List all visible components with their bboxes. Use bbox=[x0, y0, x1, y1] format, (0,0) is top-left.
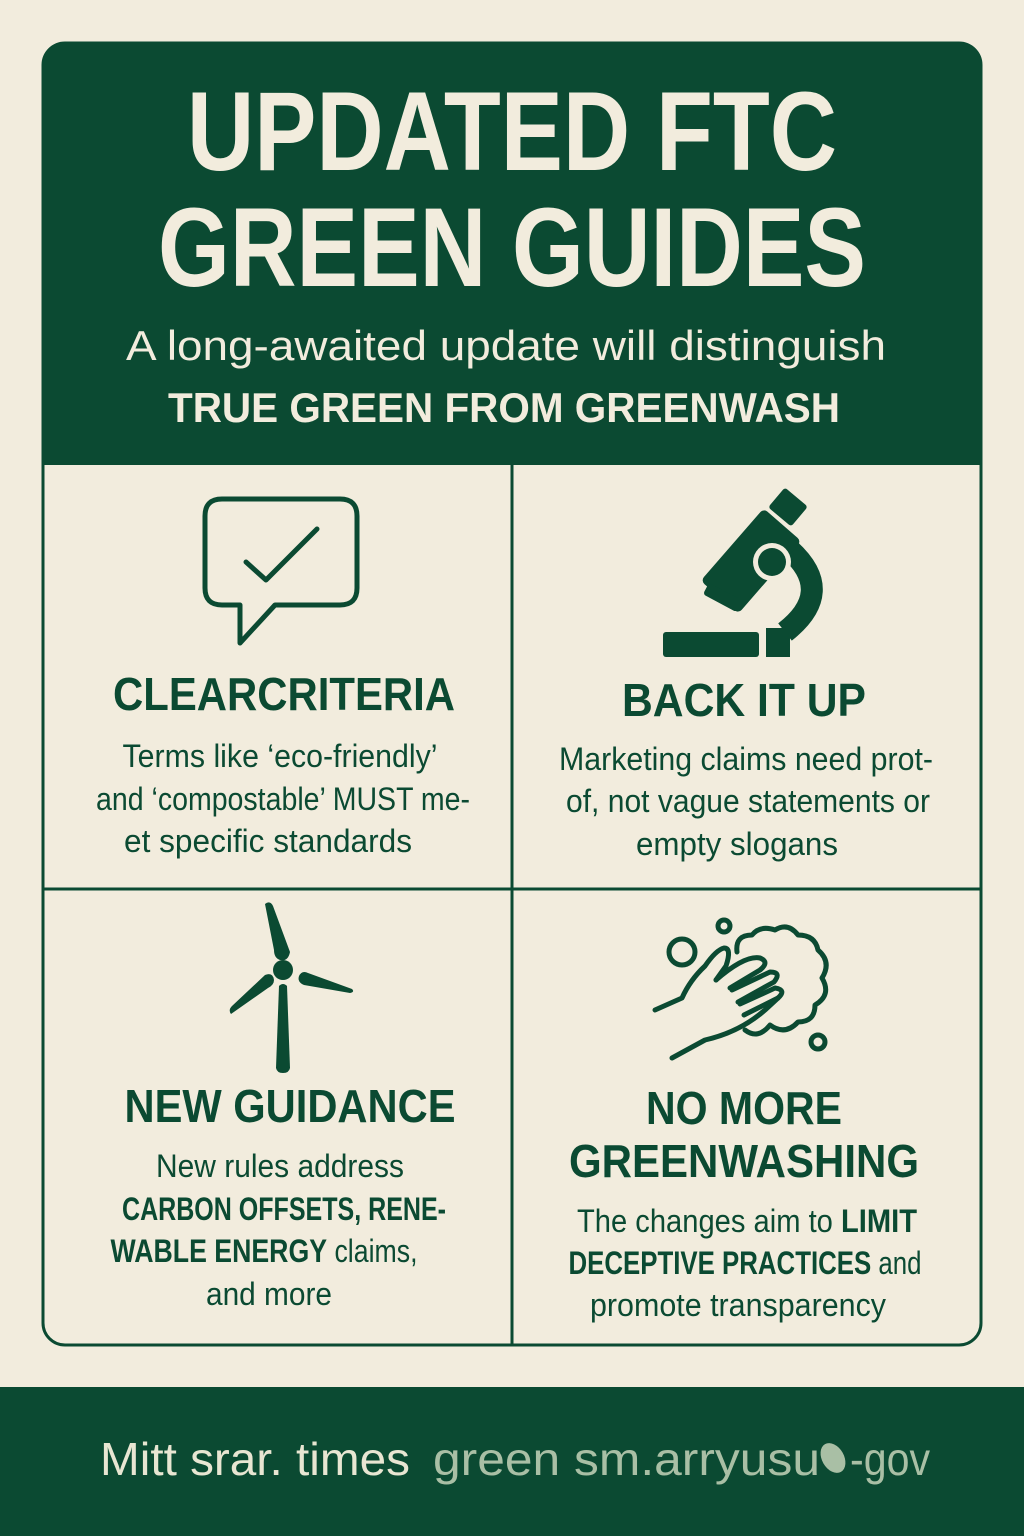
text: no more greenwashing body: The changes aim to LIMIT bbox=[577, 1203, 917, 1239]
icon: washing hands bbox=[655, 920, 826, 1058]
subtitle bbox=[126, 322, 886, 431]
heading: no more greenwashing: GREENWASHING bbox=[569, 1135, 919, 1187]
text: clear criteria body: and ‘compostable’ MUST me- bbox=[96, 781, 470, 817]
panel: clear criteria bbox=[96, 499, 470, 859]
text: clear criteria body bbox=[96, 738, 470, 859]
text: back it up body: empty slogans bbox=[636, 826, 838, 862]
text: new guidance body: and more bbox=[206, 1276, 332, 1312]
heading: clear criteria: CLEARCRITERIA bbox=[113, 668, 455, 720]
subtitle: A long-awaited update will distinguish bbox=[126, 322, 886, 369]
footer: -gov bbox=[850, 1433, 930, 1485]
panel: back it up bbox=[559, 487, 933, 862]
text: no more greenwashing body: promote transparency bbox=[590, 1287, 886, 1323]
heading: no more greenwashing: NO MORE bbox=[646, 1082, 842, 1134]
text: new guidance body: WABLE ENERGY claims, bbox=[110, 1233, 418, 1269]
title bbox=[158, 69, 866, 310]
icon: leaf bbox=[815, 1439, 851, 1477]
footer: green sm.arryusu bbox=[433, 1433, 820, 1485]
text: no more greenwashing body: DECEPTIVE PRACTICES and bbox=[568, 1245, 922, 1281]
text: new guidance body bbox=[110, 1148, 446, 1312]
heading: back it up: BACK IT UP bbox=[622, 674, 866, 726]
text: clear criteria body: Terms like ‘eco-friendly’ bbox=[122, 738, 438, 774]
panel: new guidance bbox=[110, 902, 456, 1312]
footer bbox=[0, 1387, 1024, 1536]
text: new guidance body: CARBON OFFSETS, RENE- bbox=[122, 1191, 446, 1227]
title: GREEN GUIDES bbox=[158, 185, 866, 310]
text: back it up body bbox=[559, 741, 933, 862]
text: no more greenwashing body bbox=[568, 1203, 922, 1323]
icon: speech bubble check bbox=[205, 499, 357, 643]
subtitle: TRUE GREEN FROM GREENWASH bbox=[168, 384, 840, 431]
footer: Mitt srar. times bbox=[100, 1433, 410, 1485]
text: new guidance body: New rules address bbox=[156, 1148, 404, 1184]
icon: microscope bbox=[663, 487, 812, 657]
text: clear criteria body: et specific standards bbox=[124, 823, 412, 859]
panel: main card bbox=[43, 43, 981, 1345]
text: back it up body: Marketing claims need prot- bbox=[559, 741, 933, 777]
heading: new guidance: NEW GUIDANCE bbox=[124, 1080, 456, 1132]
title: UPDATED FTC bbox=[187, 69, 837, 194]
text: back it up body: of, not vague statements or bbox=[566, 783, 930, 819]
panel: no more greenwashing bbox=[568, 920, 922, 1323]
icon: wind turbine bbox=[230, 902, 353, 1073]
heading: no more greenwashing bbox=[569, 1082, 919, 1187]
